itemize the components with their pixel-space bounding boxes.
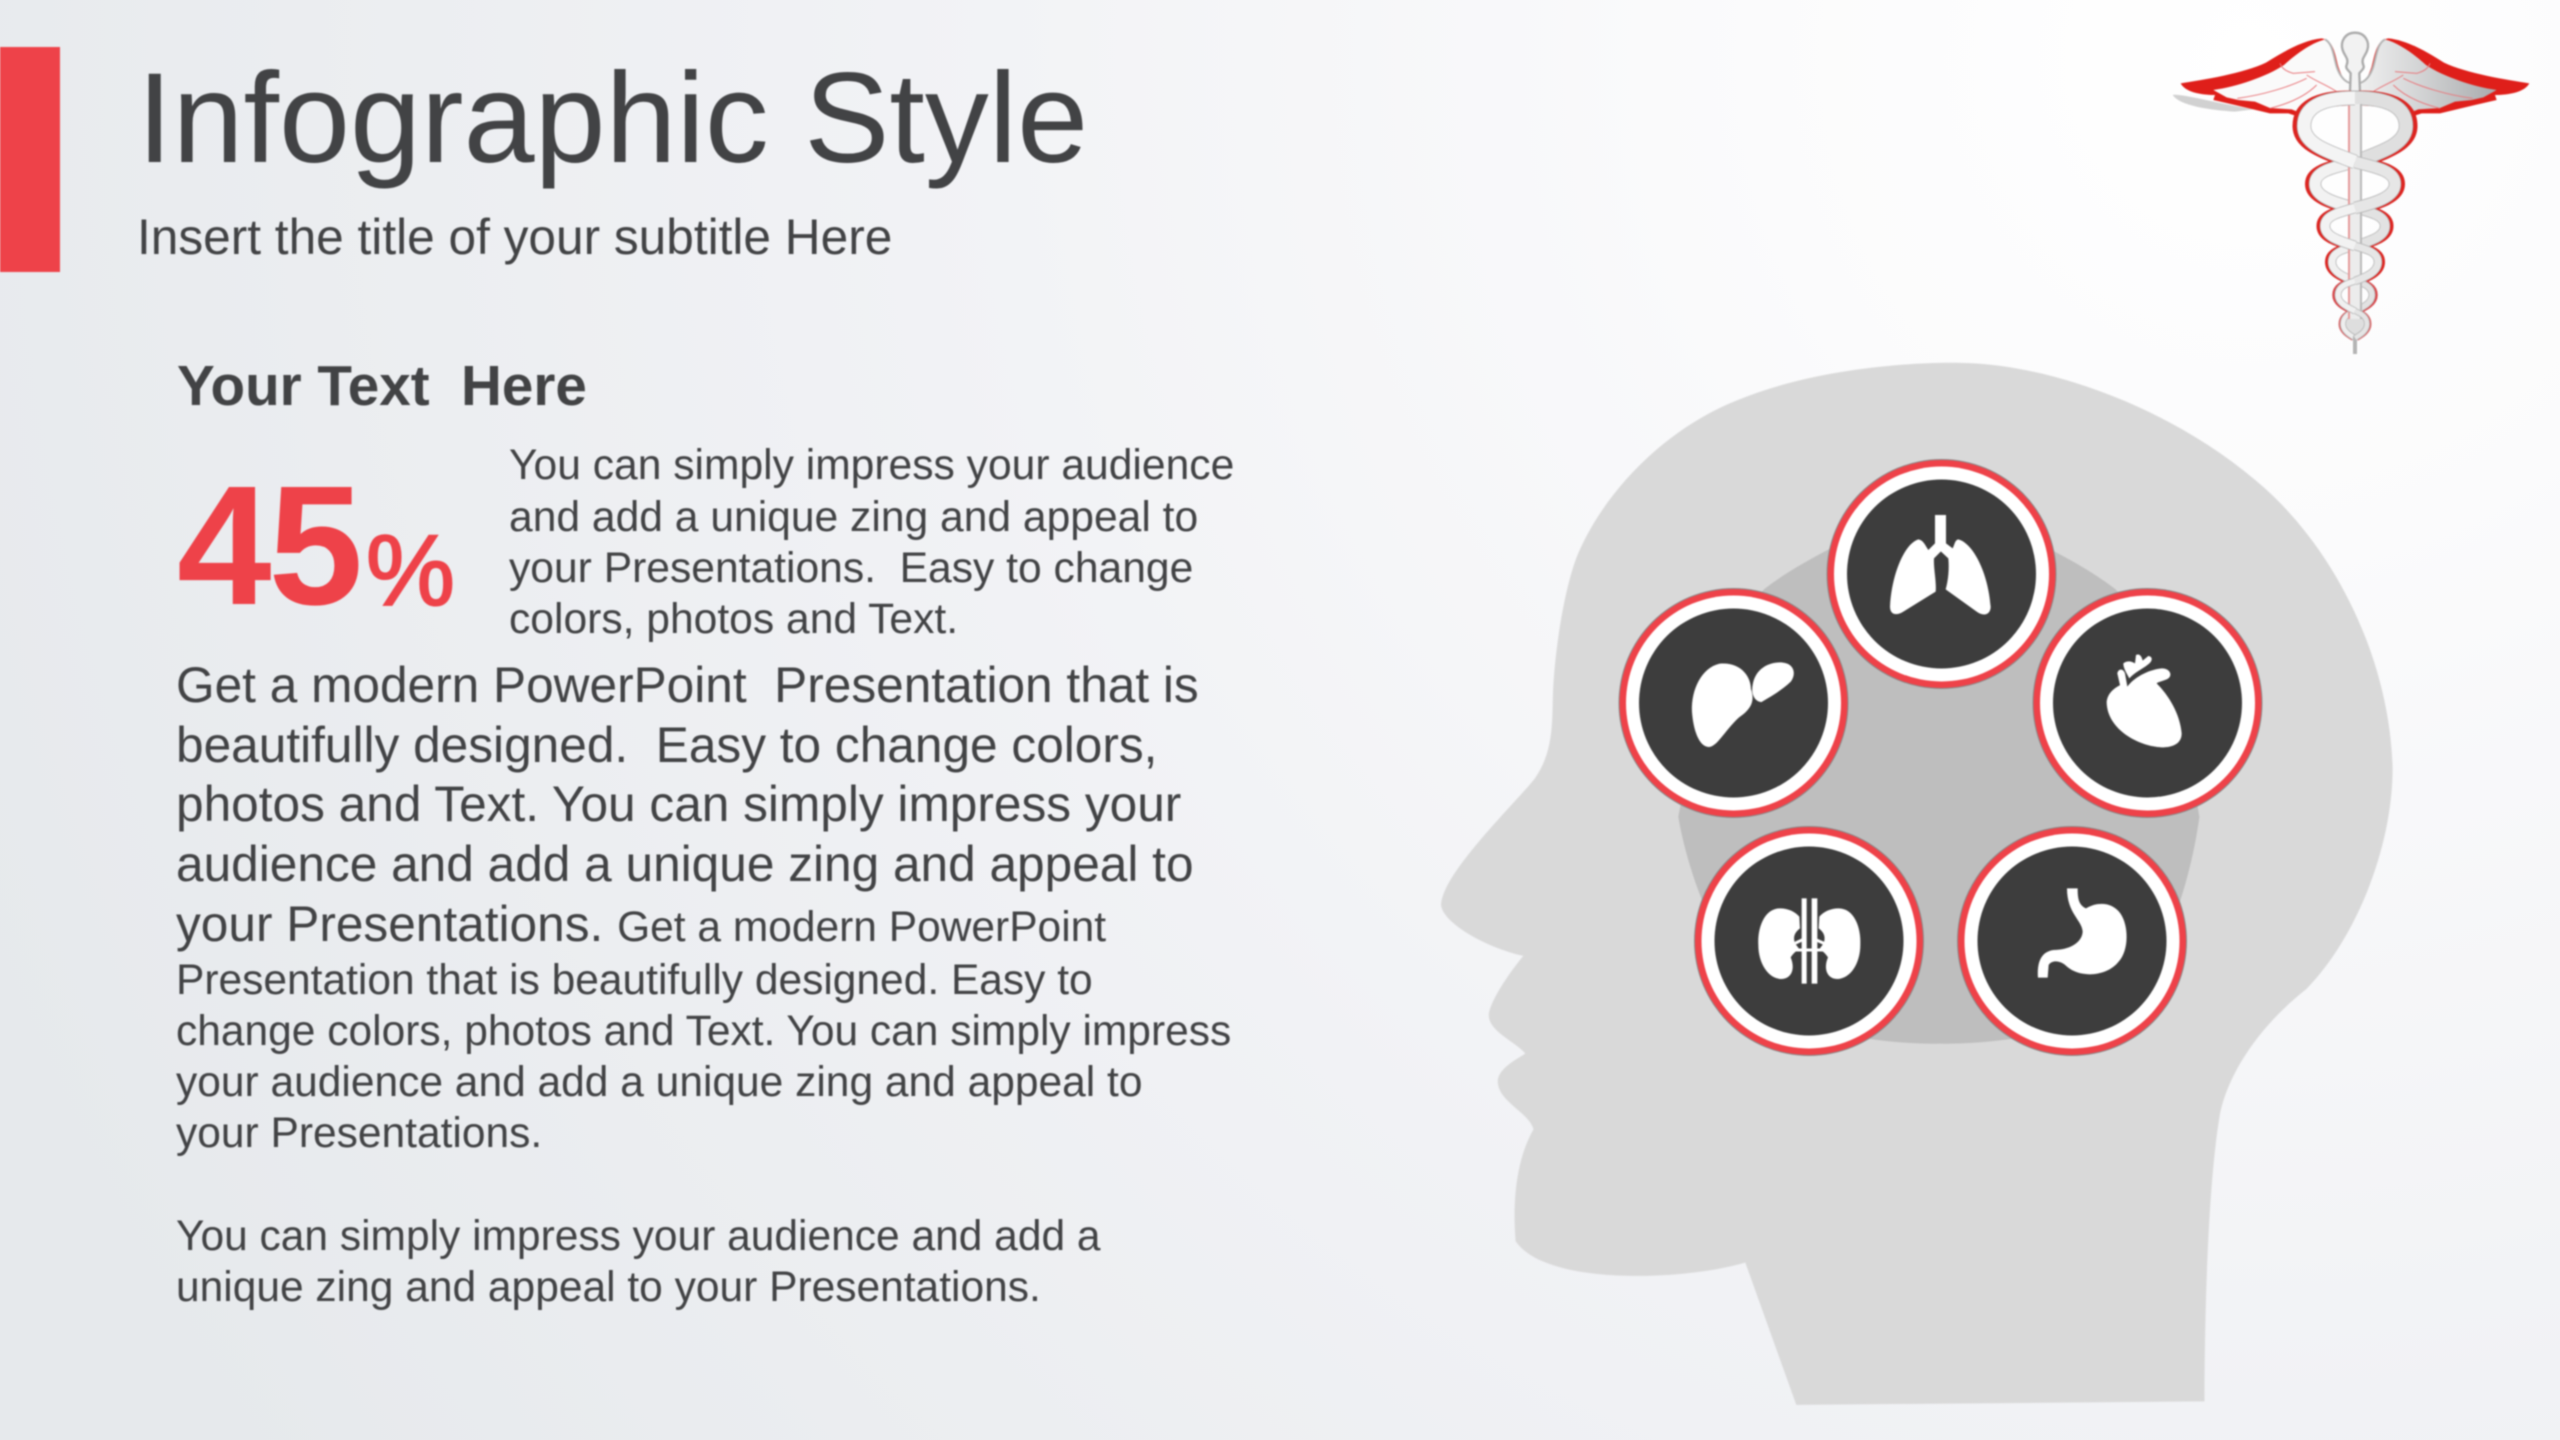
serpents [2300,98,2410,354]
statistic: 45%: % [366,515,455,627]
staff [2349,104,2361,319]
text block: main paragraph: beautifully designed. Easy to change colors, [176,717,1157,773]
statistic: 45% [177,451,455,641]
subtitle: Insert the title of your subtitle Here [137,209,892,265]
section heading: Your Text Here [177,354,587,417]
text block: main paragraph: photos and Text. You can simply impress your [176,776,1181,832]
text block: main paragraph: Presentation that is beautifully designed. Easy to [176,957,1093,1004]
red outer edges [2300,98,2410,338]
text block: main paragraph: your audience and add a unique zing and appeal to [176,1059,1142,1106]
wings [2173,33,2529,117]
icon: heart badge [2032,588,2262,818]
icon: caduceus [2173,33,2529,354]
text block: statistic description: You can simply impress your audience [509,441,1234,489]
text block: statistic description [509,441,1234,643]
text block: statistic description: colors, photos and Text. [509,595,958,643]
accent bar [0,47,60,272]
pentagon backdrop [1678,501,2199,1044]
front serpent [2304,98,2395,338]
icon: kidneys badge [1694,826,1924,1056]
text block: statistic description: your Presentations. Easy to change [509,544,1193,592]
text block: main paragraph: your Presentations. Get a modern PowerPoint [176,896,1106,952]
back serpent [2315,98,2406,338]
icon: lungs badge [1826,459,2056,689]
text block: main paragraph: audience and add a unique zing and appeal to [176,836,1194,892]
text block: main paragraph: your Presentations. [176,1110,542,1157]
icon: liver badge [1618,588,1848,818]
text block: main paragraph: Get a modern PowerPoint Presentation that is [176,657,1199,713]
text block: closing paragraph: You can simply impress your audience and add a [176,1213,1101,1260]
head silhouette [1441,363,2393,1405]
text block: closing paragraph [176,1213,1101,1311]
tail core [2345,312,2365,336]
icon: stomach badge [1957,826,2187,1056]
text block: statistic description: and add a unique zing and appeal to [509,493,1198,541]
title: Infographic Style [137,47,1088,190]
text block: main paragraph: change colors, photos and Text. You can simply impress [176,1008,1231,1055]
text block: closing paragraph: unique zing and appeal to your Presentations. [176,1264,1041,1311]
text block: main paragraph [176,657,1231,1157]
statistic: 45%: 45 [177,451,360,641]
